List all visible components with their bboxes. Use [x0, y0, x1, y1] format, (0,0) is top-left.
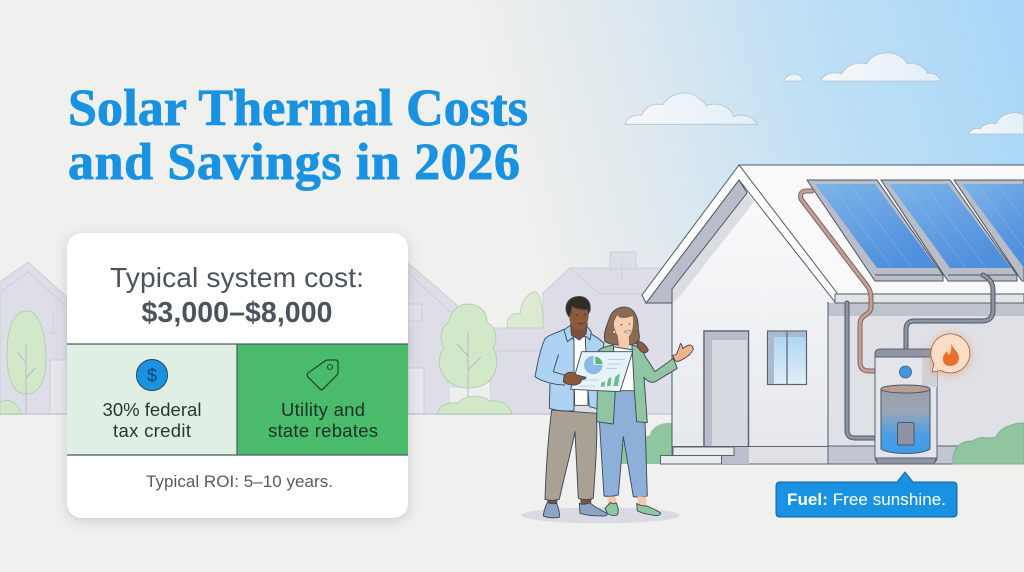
background trees and bushes: [0, 292, 543, 414]
heading: typical system cost: [110, 261, 364, 329]
woman: shoes: [605, 503, 618, 515]
background neighbourhood houses: [0, 252, 680, 414]
panel: federal tax credit: [67, 344, 237, 455]
panel: utility and state rebates: Utility and: [281, 399, 365, 420]
man's hand: [563, 372, 586, 385]
house: door: [704, 331, 748, 447]
icon: dollar coin: [136, 360, 168, 390]
woman: jeans: [599, 389, 647, 497]
icon: flame bubble: [931, 334, 970, 373]
panel: utility and state rebates: state rebates: [268, 420, 378, 441]
solar panel 2: [881, 180, 1017, 281]
tank gauge: [900, 366, 912, 378]
solar panel 1: [807, 180, 943, 281]
panel: utility and state rebates: [237, 344, 408, 455]
house: front wall: [672, 180, 835, 464]
house: base and steps: [660, 446, 828, 464]
heading: typical system cost: $3,000–$8,000: [142, 297, 332, 329]
man: jacket: [535, 326, 604, 411]
man: trousers: [545, 410, 597, 500]
panel: federal tax credit: tax credit: [113, 420, 191, 441]
heading: typical system cost: Typical system cost:: [110, 261, 364, 293]
panel: federal tax credit: 30% federal: [102, 399, 202, 420]
pipe: copper: [801, 191, 878, 371]
pipe: dark supply: [906, 275, 993, 349]
man: shoes: [543, 502, 559, 518]
panel: cost card: [67, 233, 408, 518]
callout: fuel: [776, 472, 957, 517]
house: eave: [835, 294, 1024, 303]
text: typical ROI: Typical ROI: 5–10 years.: [146, 472, 333, 491]
woman: [597, 307, 693, 516]
solar panels: [807, 180, 1024, 281]
woman: cardigan: [597, 345, 677, 424]
woman: hair: [604, 307, 639, 345]
ground shadow: [521, 507, 680, 523]
house: window: [768, 331, 806, 384]
tank cutaway: [881, 389, 930, 454]
pipe: grey return: [847, 303, 878, 438]
title: [68, 80, 528, 191]
pipes: [801, 191, 993, 438]
title: Solar Thermal Costs: [68, 80, 528, 137]
icon: dollar coin: $: [147, 366, 157, 386]
house: gable roof: [646, 180, 747, 303]
woman: top: [613, 347, 635, 391]
woman: hand on shoulder: [637, 341, 648, 353]
icon: price tag: [307, 360, 338, 390]
clouds: [625, 53, 1024, 134]
tablet: [571, 352, 633, 392]
callout: fuel: Fuel: Free sunshine.: [787, 490, 946, 509]
people: [521, 296, 693, 523]
house: [642, 165, 1024, 464]
woman: neck and face: [617, 333, 629, 347]
title: and Savings in 2026: [68, 134, 520, 191]
bush beside the steps: [620, 423, 673, 464]
woman: raised hand: [673, 343, 693, 362]
man: ankles: [547, 497, 592, 505]
man: neck and face: [571, 323, 587, 340]
water tank: [875, 349, 937, 464]
house: roof surface: [739, 165, 1024, 293]
solar panel 3: [954, 180, 1024, 281]
house: rear wall: [828, 293, 1024, 464]
man: shirt: [573, 337, 588, 405]
woman: feet: [607, 497, 647, 506]
man: [535, 296, 607, 518]
right bush: [953, 423, 1024, 464]
